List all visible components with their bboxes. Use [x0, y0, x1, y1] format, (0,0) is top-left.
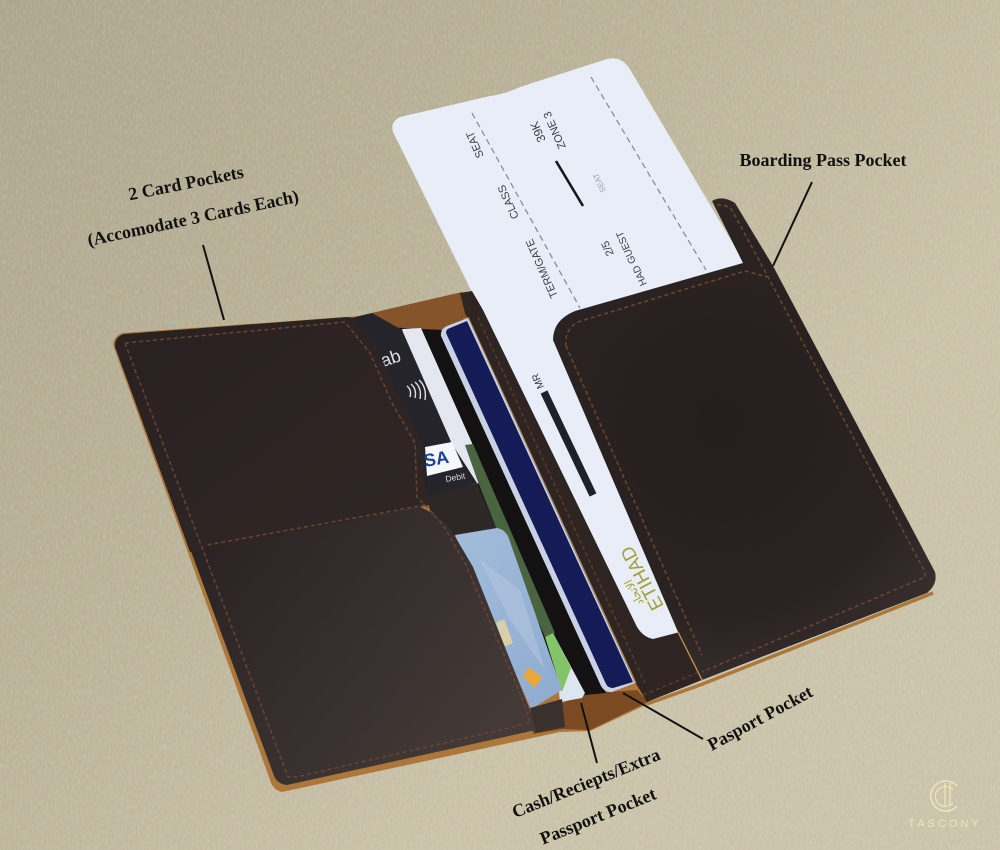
upper card: dark bank card: Debit	[445, 471, 467, 484]
leader line	[623, 693, 703, 739]
label: Pasport Pocket	[623, 681, 816, 755]
back cover tan edge	[113, 292, 652, 792]
boarding pass	[392, 58, 745, 640]
lower blue card	[455, 528, 562, 709]
boarding pass printed text: SEAT	[591, 172, 608, 194]
leader line	[203, 245, 224, 320]
green photo card strip	[465, 444, 555, 637]
logo: Tascony: TASCONY	[908, 818, 982, 830]
label: Boarding Pass Pocket	[739, 150, 907, 266]
wallet	[113, 58, 936, 792]
bottom interior lining	[530, 690, 648, 734]
contactless icon	[407, 380, 425, 400]
pocket stitching	[566, 205, 925, 672]
lower card pocket	[172, 500, 536, 785]
upper card pocket	[115, 317, 430, 552]
label: Cash/Reciepts/Extra Passport Pocket: Cash/Reciepts/Extra	[509, 744, 663, 822]
label: Pasport Pocket: Pasport Pocket	[704, 681, 816, 755]
boarding pass printed text	[464, 109, 650, 390]
upper card: dark bank card: SA	[422, 447, 450, 471]
airline logo: الاتحاد	[623, 577, 647, 607]
leader line	[773, 182, 812, 266]
label: Boarding Pass Pocket: Boarding Pass Pocket	[739, 150, 907, 170]
boarding pass printed text: MR	[530, 372, 547, 390]
boarding pass printed text: TERM/GATE	[524, 237, 561, 300]
label: 2 Card Pockets: 2 Card Pockets	[127, 162, 245, 204]
label: Cash/Reciepts/Extra Passport Pocket: Passport Pocket	[537, 784, 659, 848]
logo: Tascony	[908, 781, 982, 830]
passport and boarding pass pocket panel	[553, 198, 936, 704]
label: 2 Card Pockets: (Accomodate 3 Cards Each)	[86, 186, 301, 251]
interior dark pocket shade	[368, 326, 606, 700]
boarding pass printed text: 39K	[527, 119, 549, 144]
leader line	[581, 703, 597, 763]
upper card: dark bank card: ab	[378, 346, 403, 371]
label: 2 Card Pockets	[86, 162, 301, 320]
pocket stitching	[125, 322, 530, 777]
upper card: dark bank card	[352, 313, 480, 496]
leather strip under lower card	[530, 699, 565, 733]
leather behind lower card	[426, 483, 497, 536]
airline logo: ETIHAD	[617, 542, 668, 614]
white card edge	[553, 633, 585, 702]
tan edge	[647, 593, 933, 704]
passport	[441, 318, 635, 692]
tan seam	[678, 632, 702, 680]
boarding pass printed text: SEAT	[464, 129, 487, 160]
boarding pass printed text: CLASS	[496, 183, 522, 221]
green card area	[545, 633, 571, 692]
redaction marks	[556, 161, 583, 206]
label: Cash/Reciepts/Extra Passport Pocket	[509, 703, 663, 848]
boarding pass printed text: 2/5	[600, 239, 617, 258]
spine strip	[460, 291, 702, 702]
boarding pass printed text: HAD	[631, 263, 650, 287]
card pockets panel	[115, 317, 536, 785]
boarding pass printed text: GUEST	[615, 229, 639, 265]
top interior lining	[350, 292, 468, 332]
boarding pass printed text: ZONE 3	[542, 109, 569, 151]
dashed lines on boarding pass	[472, 77, 706, 308]
